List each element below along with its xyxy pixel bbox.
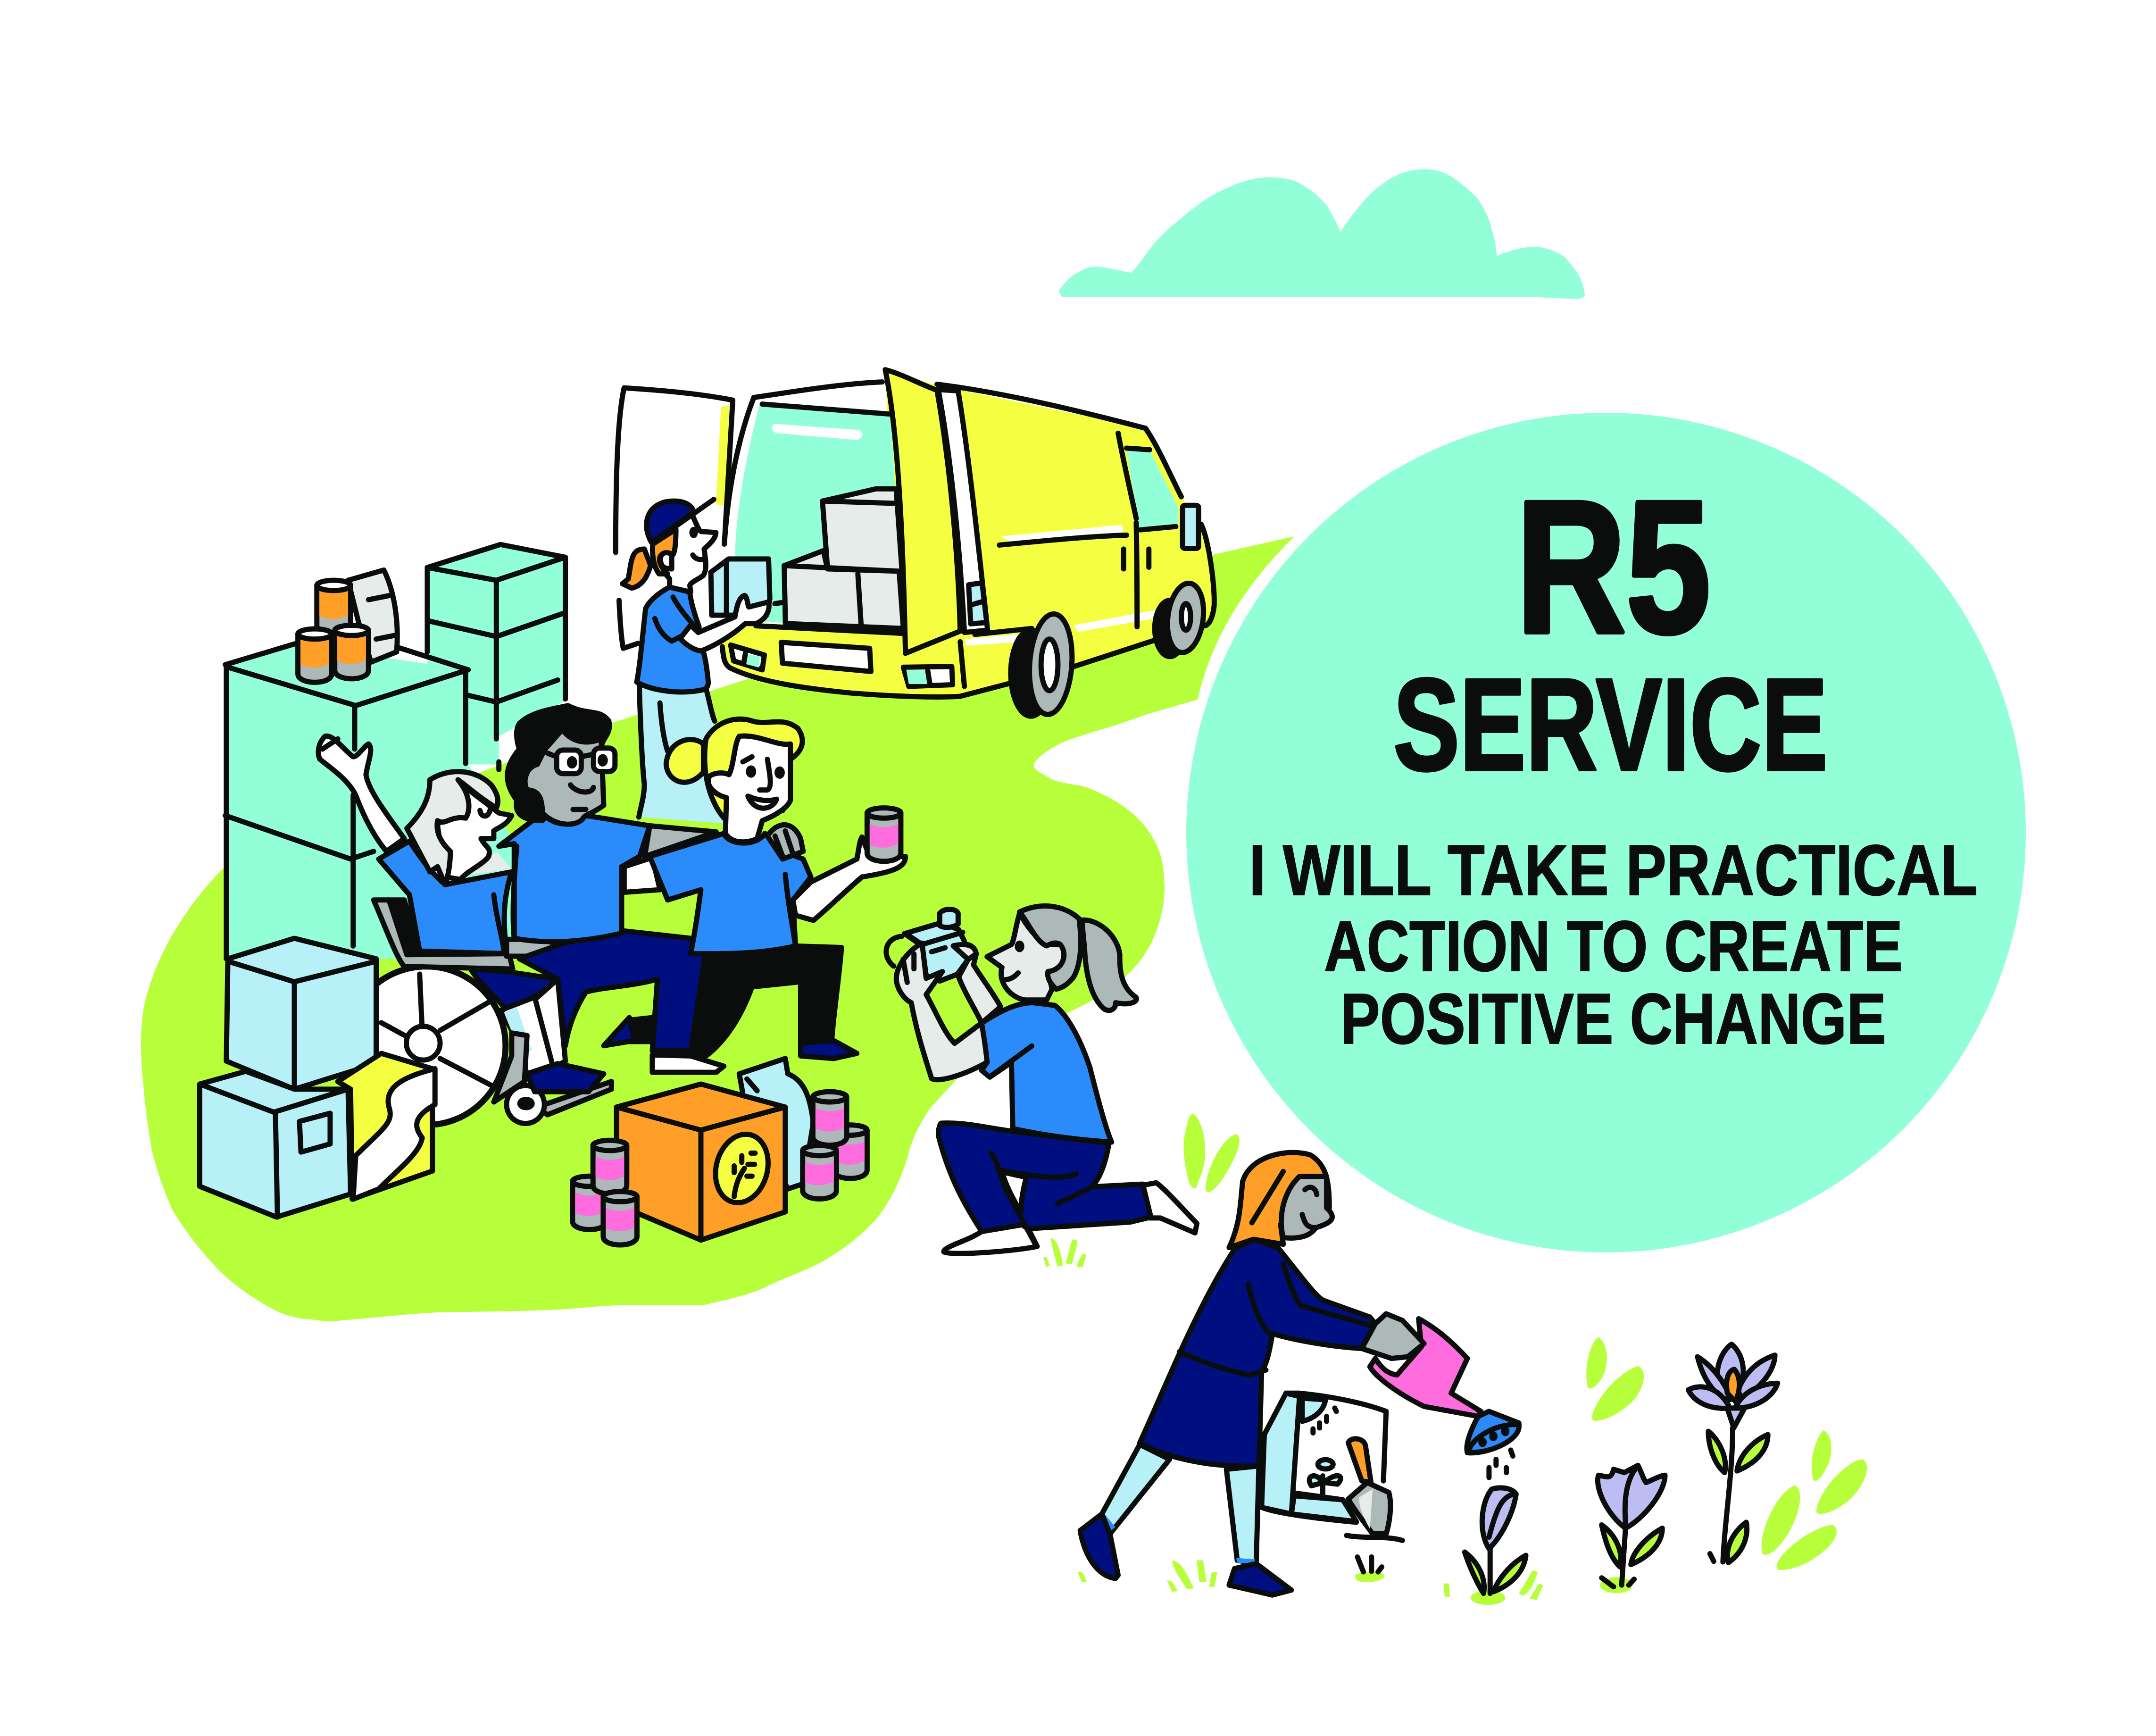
- blonde woman kneeling: [624, 719, 906, 1059]
- front box stack: [225, 643, 517, 959]
- cloud: [1058, 169, 1585, 299]
- man with glasses: [494, 706, 724, 1072]
- satchel with trowel: [1262, 1393, 1402, 1540]
- leaf cluster right: [1762, 1430, 1867, 1570]
- head and ponytail: [987, 906, 1136, 1010]
- dress: [1140, 1239, 1375, 1466]
- grass: small tuft: [1043, 1238, 1086, 1268]
- woman watering flowers: [1080, 1152, 1778, 1605]
- heading: SERVICE: SERVICE: [1393, 651, 1828, 798]
- grass tufts near kneeling photographer: [1043, 1114, 1240, 1268]
- rear plate and lights: [731, 643, 953, 686]
- wheelchair user's legs: [471, 969, 566, 1074]
- pink cans left: [573, 1140, 637, 1245]
- woman in wheelchair: [318, 736, 604, 1092]
- van wheels: [1011, 582, 1207, 716]
- wheelchair: [347, 900, 611, 1125]
- heading and pledge text: [1249, 461, 1978, 1059]
- head scarf and face: [1229, 1152, 1332, 1248]
- grass tufts by feet: [1066, 1241, 1543, 1600]
- leaves pair above flowers: [1586, 1337, 1644, 1421]
- flower bud: [1465, 1488, 1526, 1605]
- arms and hands: [886, 909, 1032, 1080]
- woman loading van: [623, 500, 770, 824]
- pants and feet: [938, 1123, 1197, 1253]
- water drops: [1489, 1450, 1513, 1477]
- small grass strokes by trowel: [1357, 1557, 1382, 1572]
- pledge line 2: ACTION TO CREATE: [1324, 906, 1903, 986]
- pledge line 3: POSITIVE CHANGE: [1340, 979, 1886, 1059]
- jug: [739, 1059, 814, 1189]
- heading: R5: R5: [1516, 461, 1711, 672]
- back box stack: [427, 544, 566, 769]
- lime grass and leaves near flowers: [1066, 1241, 1867, 1600]
- grass: tall leaves: [1183, 1114, 1240, 1192]
- flower middle: [1598, 1465, 1665, 1593]
- mirror: [1182, 505, 1199, 548]
- orange box with logo: [616, 1084, 785, 1240]
- group scene: boxes and volunteers: [200, 544, 906, 1245]
- flower tall: [1688, 1344, 1778, 1562]
- pink cans right: [803, 1092, 867, 1199]
- light blue boxes: [200, 938, 435, 1217]
- van body: [721, 370, 1215, 697]
- legs and shoes: [1080, 1444, 1291, 1595]
- pledge line 1: I WILL TAKE PRACTICAL: [1249, 830, 1978, 910]
- shirt: [955, 1003, 1112, 1142]
- van rear door left: [616, 388, 733, 648]
- grass strokes: [1357, 1557, 1382, 1572]
- woman taking photo: [886, 906, 1197, 1253]
- mint circle: [1186, 413, 2026, 1252]
- boxes in van: [775, 489, 903, 628]
- lime ground path: [141, 536, 1294, 1321]
- watering can: [1362, 1314, 1519, 1453]
- bag and orange cans: [298, 570, 397, 682]
- van scene: [616, 370, 1215, 824]
- open van door: [885, 370, 988, 653]
